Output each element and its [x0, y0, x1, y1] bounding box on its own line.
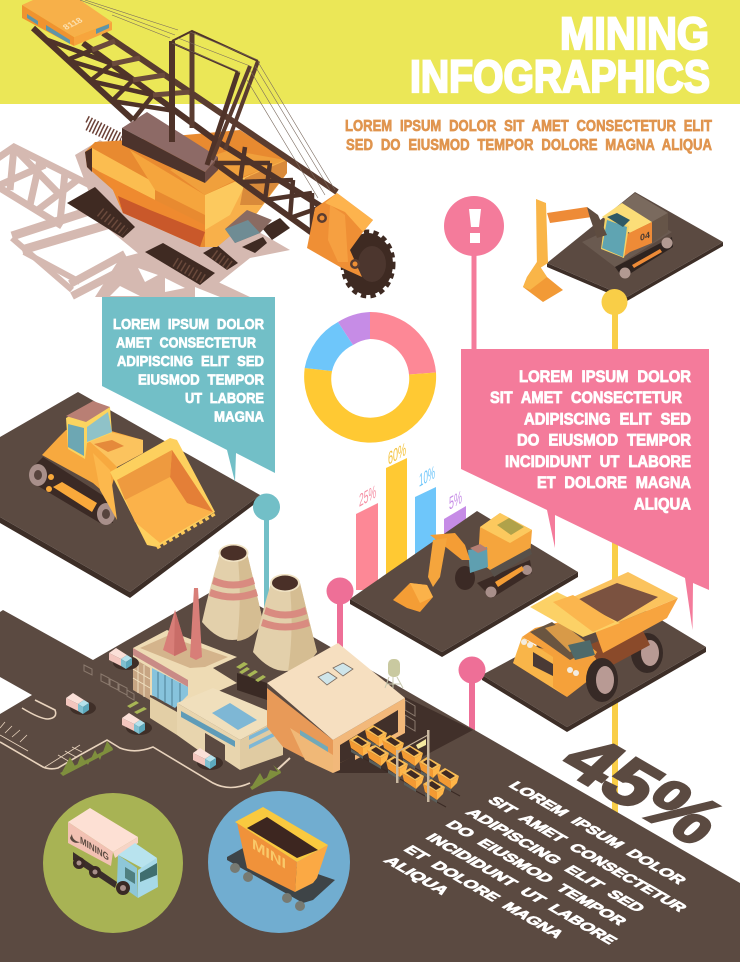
board: wheel loader: [0, 392, 260, 598]
pink speech bubble: ALIQUA: [634, 496, 691, 514]
boom lattice: [33, 28, 337, 233]
ladder: [87, 119, 122, 144]
isometric paragraph: ALIQUA: [380, 854, 453, 897]
dragline shadow: [0, 140, 290, 297]
donut chart: [304, 312, 436, 443]
bar chart: [356, 439, 466, 590]
isometric paragraph: SIT AMET CONSECTETUR: [484, 794, 691, 914]
fence tiles: [84, 665, 415, 731]
header band: [0, 0, 740, 104]
mining ground: [0, 585, 740, 962]
isometric paragraph: INCIDIDUNT UT LABORE: [422, 831, 621, 947]
pink speech bubble: ET DOLORE MAGNA: [537, 474, 691, 492]
blue cart badge: [208, 791, 350, 933]
isometric paragraph: LOREM IPSUM DOLOR: [505, 779, 690, 887]
teal speech bubble: EIUSMOD TEMPOR: [138, 372, 264, 388]
board: dump truck: [482, 598, 706, 732]
45 percent: 45%: [544, 722, 740, 858]
blue cart badge: MINI: [252, 835, 286, 872]
bar chart: 25%: [359, 481, 376, 512]
teal speech bubble: MAGNA: [214, 408, 264, 426]
teal speech bubble: ADIPISCING ELIT SED: [117, 353, 264, 370]
crawler tracks: [67, 187, 290, 285]
turntable: [122, 112, 218, 183]
teal speech bubble: UT LABORE: [185, 390, 264, 407]
pink speech bubble: DO EIUSMOD TEMPOR: [517, 432, 691, 450]
teal speech bubble: LOREM IPSUM DOLOR: [113, 316, 264, 333]
board: excavator center: [350, 511, 578, 657]
center excavator: [393, 513, 532, 612]
pink pin center: [326, 578, 354, 604]
cables: [80, 0, 335, 198]
power plant: [133, 588, 283, 770]
isometric paragraph: [380, 779, 691, 947]
bucket wheel: [307, 193, 393, 295]
pink speech bubble: SIT AMET CONSECTETUR: [490, 389, 682, 407]
cab: 8118: [60, 16, 85, 31]
machine body: [85, 130, 287, 247]
bar chart: 10%: [419, 462, 435, 492]
teal speech bubble: AMET CONSECTETUR: [116, 334, 256, 352]
connector lines: [264, 240, 618, 843]
pink speech bubble: LOREM IPSUM DOLOR: [519, 368, 691, 386]
isometric paragraph: DO EIUSMOD TEMPOR: [442, 818, 631, 928]
water tower: [385, 659, 403, 688]
green truck badge: MINING: [80, 835, 109, 864]
hangar: [267, 643, 405, 773]
board: top excavator: [547, 192, 723, 301]
bushes: [60, 741, 281, 790]
small green plots: [127, 662, 266, 714]
teal speech bubble: [102, 297, 275, 482]
dragline excavator: [22, 0, 393, 295]
wheel loader: [29, 401, 215, 548]
pink speech bubble: ADIPISCING ELIT SED: [524, 410, 691, 428]
mine carts: [349, 725, 460, 807]
top excavator: 04: [640, 229, 651, 243]
bar chart: 60%: [388, 439, 406, 470]
ground shadow: [240, 697, 473, 773]
mini trucks: [66, 648, 223, 770]
title: MINING: [560, 8, 709, 59]
dump truck: [513, 572, 678, 702]
pink speech bubble: INCIDIDUNT UT LABORE: [505, 453, 691, 471]
cooling towers: [202, 544, 317, 672]
bar chart: 5%: [449, 487, 462, 515]
green truck badge: [43, 793, 183, 933]
pink pin truck: [458, 656, 486, 684]
subtitle: [345, 118, 712, 154]
teal pin: [253, 494, 280, 520]
top excavator: [523, 193, 673, 302]
masts and A-frame: [172, 31, 258, 165]
gantry poles: [396, 730, 430, 802]
isometric paragraph: ET DOLORE MAGNA: [400, 843, 568, 941]
alert pin: [444, 196, 504, 256]
yellow pin: [602, 289, 628, 315]
pink speech bubble: [461, 349, 709, 630]
isometric paragraph: ADIPISCING ELIT SED: [462, 806, 649, 915]
title: [410, 8, 710, 102]
cab: [22, 0, 112, 46]
roads and parking: [0, 700, 290, 788]
